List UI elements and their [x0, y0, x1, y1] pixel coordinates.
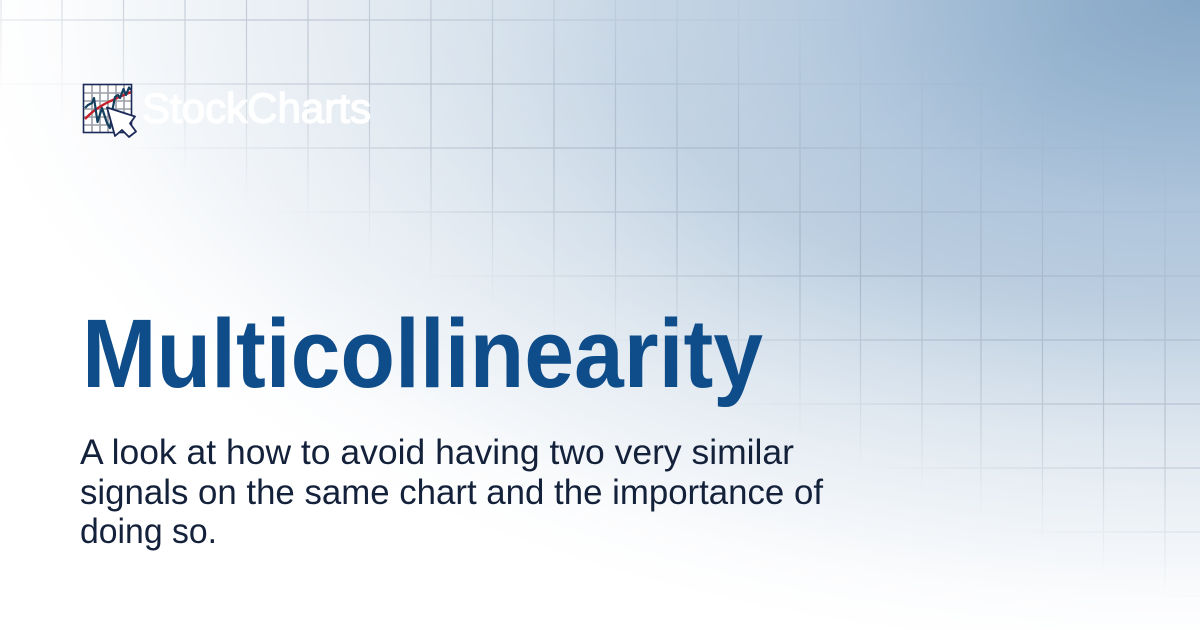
wordmark: StockCharts [142, 84, 371, 132]
subtitle text block: A look at how to avoid having two very similar [80, 433, 794, 472]
logo: StockCharts [82, 84, 371, 138]
title: Multicollinearity [82, 299, 763, 408]
icon: chart with cursor [84, 84, 136, 137]
subtitle text block: signals on the same chart and the importance of [80, 473, 823, 512]
subtitle text block: doing so. [80, 512, 217, 551]
